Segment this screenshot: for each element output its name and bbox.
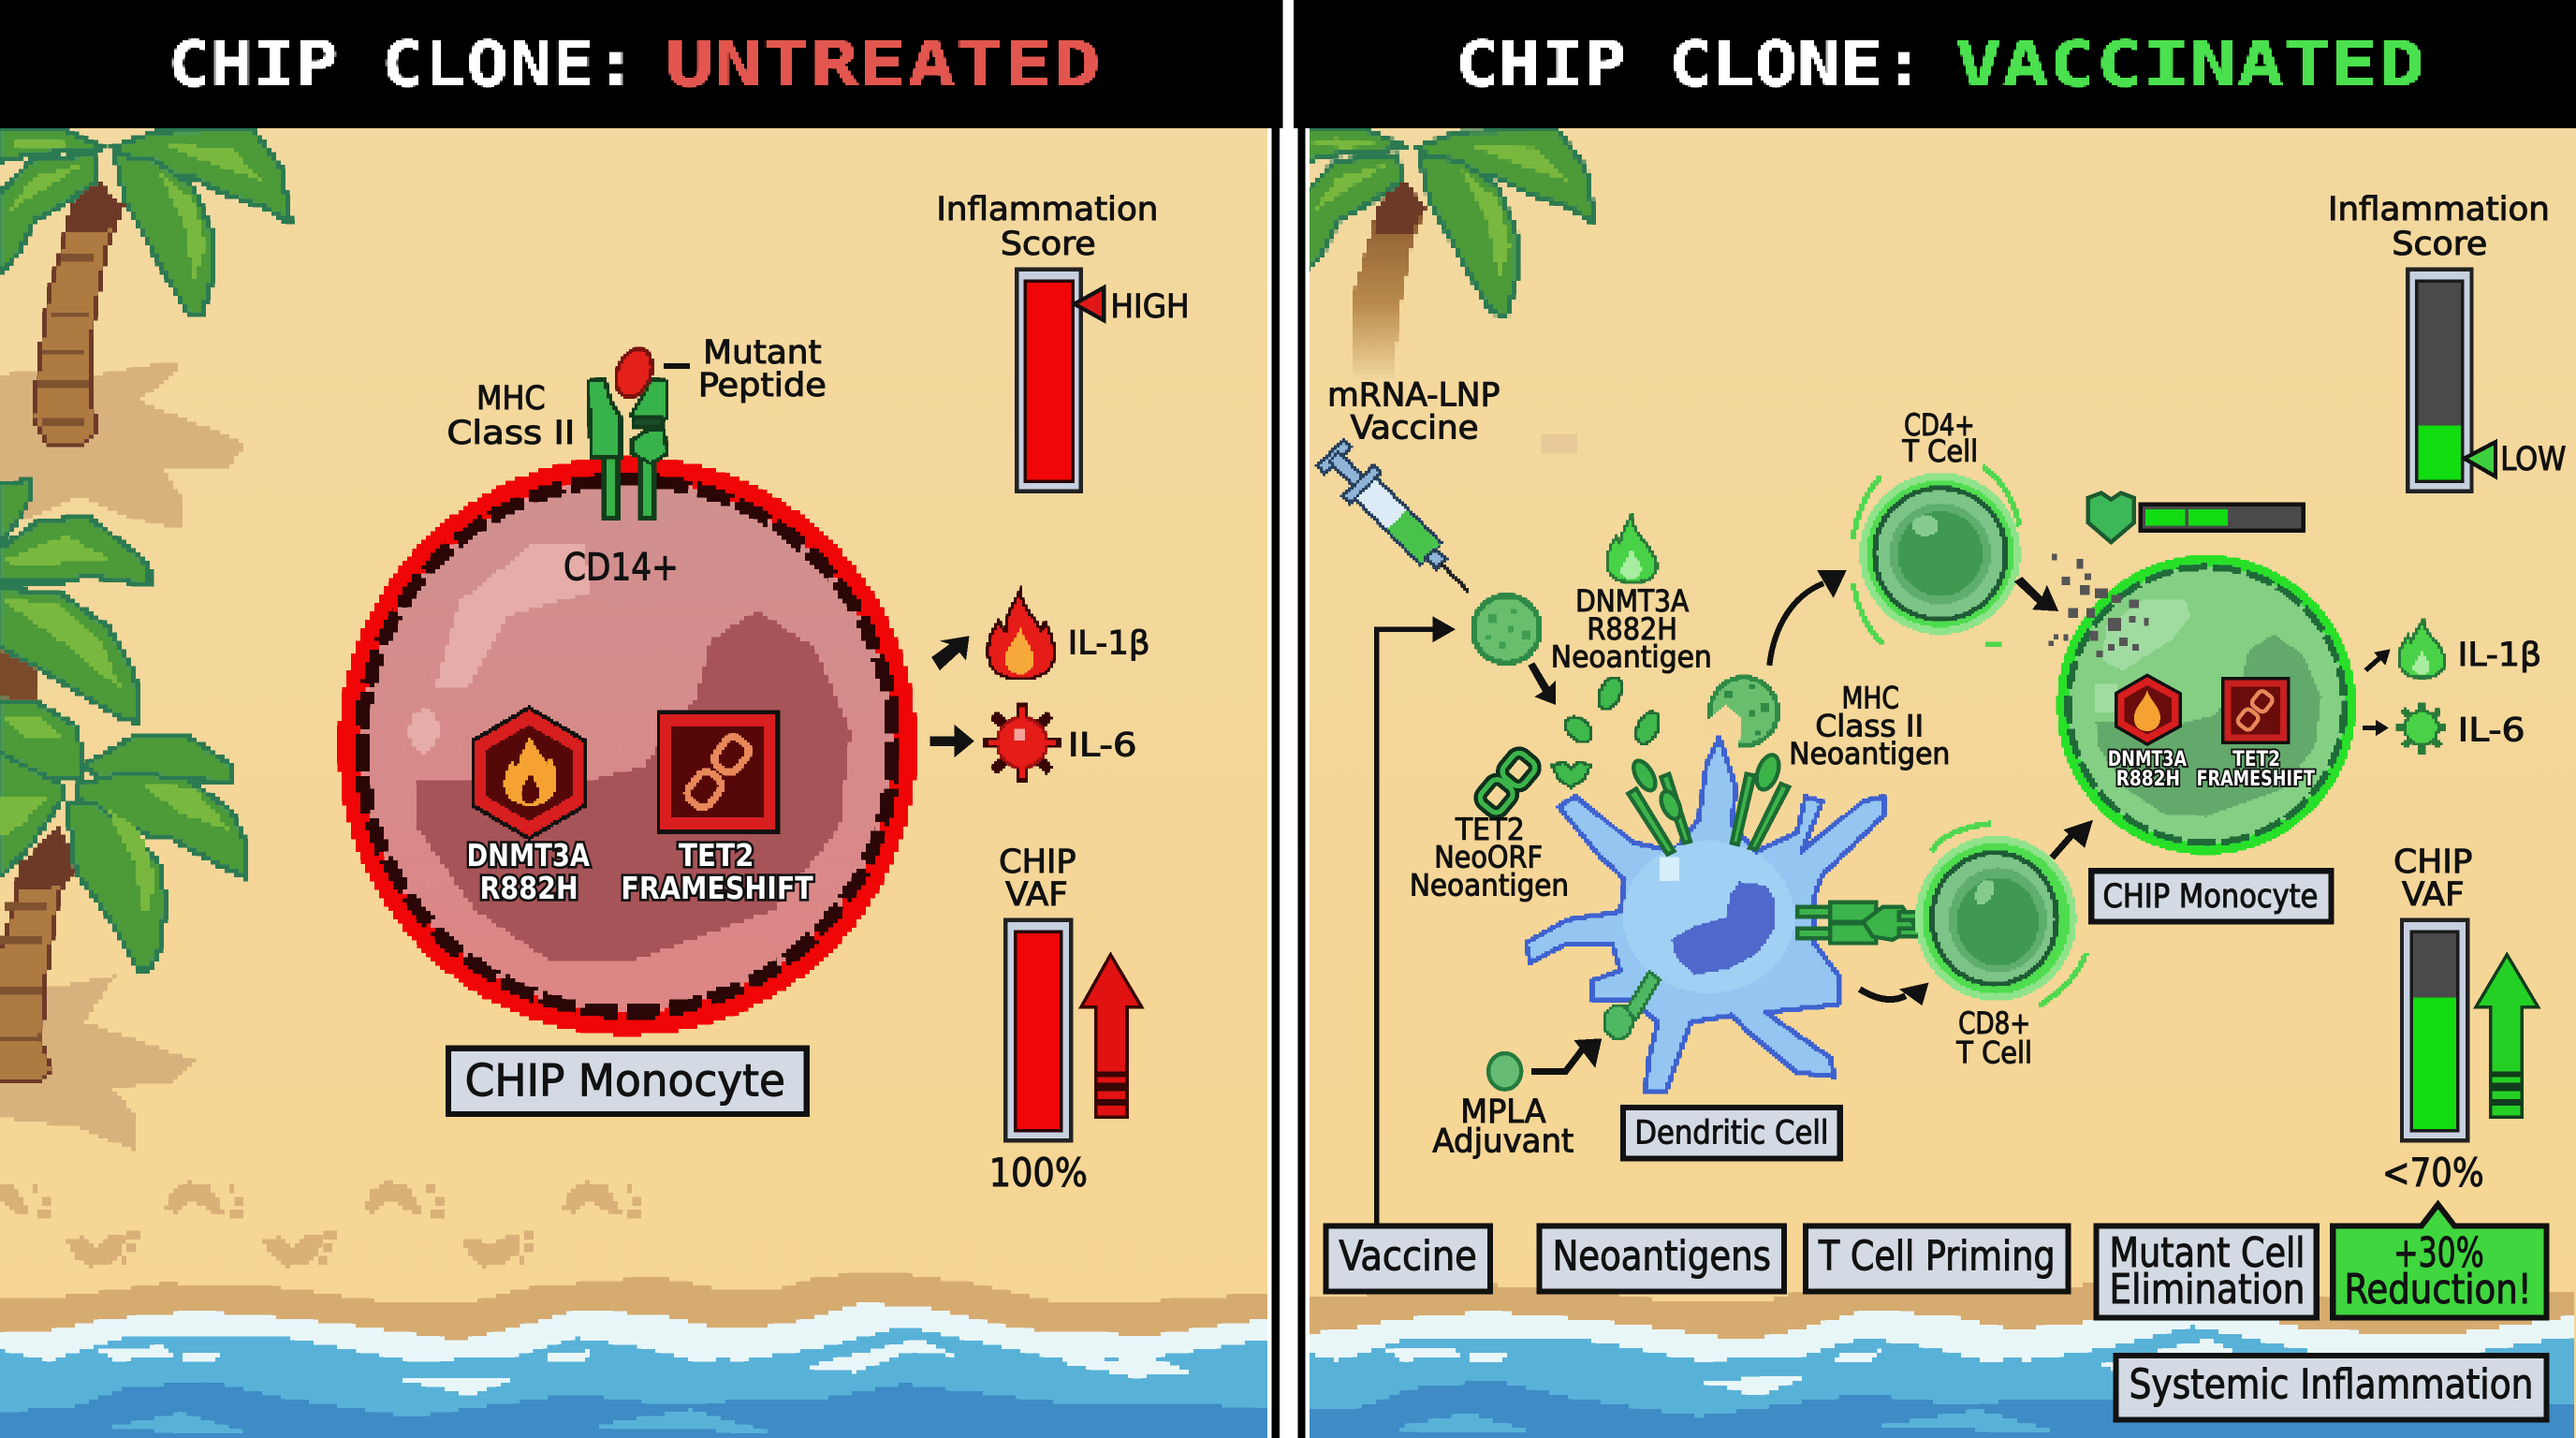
label: Mutant Peptide [664,333,827,404]
header bar [0,0,2576,128]
label: CD8+ T Cell: CD8+ [1958,1007,2030,1041]
label: DNMT3A R882H Neoantigen [1551,585,1712,675]
icon: green flame IL-1β [2399,621,2445,677]
arrow: MPLA to dendritic cell [1531,1038,1602,1071]
dendritic cell [1526,738,1883,1091]
label: TET2 FRAMESHIFT [621,837,813,906]
nucleus [414,609,851,963]
label: DNMT3A R882H: R882H [479,870,578,906]
label: MPLA Adjuvant: MPLA [1460,1093,1546,1131]
label: MPLA Adjuvant [1432,1093,1573,1160]
label: MHC Class II Neoantigen [1789,682,1950,771]
highlight [435,544,592,688]
title: vaccinated [1456,27,2425,100]
arrow: VAF green [2476,955,2539,1117]
arrow to IL-6 [929,725,974,757]
gauge: inflammation low [2408,270,2472,492]
gauge: VAF below 70 percent [2402,920,2467,1140]
beach scenery right: palm and ocean [1288,130,2576,1438]
label: TET2 NeoORF Neoantigen [1410,814,1569,903]
label: mRNA-LNP Vaccine [1327,376,1500,448]
label: TET2 NeoORF Neoantigen: NeoORF [1434,842,1543,875]
inflammation score heading right [2328,190,2550,263]
title: untreated: UNTREATED [666,27,1101,100]
label: small DNMT3A R882H: DNMT3A [2108,748,2188,771]
label: MHC Class II: MHC [476,379,546,418]
inflammation score heading right: Score [2392,225,2487,263]
center divider [1267,128,1310,1438]
nucleus [2096,634,2321,816]
step: Neoantigens: Neoantigens [1553,1233,1771,1281]
label: DNMT3A R882H Neoantigen: R882H [1587,613,1677,647]
MHC molecules on dendritic cell [1628,752,1789,855]
title: vaccinated: CHIP CLONE: [1456,27,1925,100]
icon: small TET2 badge [2223,679,2289,742]
callout: 30 percent reduction: Reduction! [2345,1266,2532,1313]
step: T Cell Priming: T Cell Priming [1818,1233,2056,1281]
inflammation score heading [936,190,1158,263]
step: Mutant Cell Elimination [2097,1225,2317,1318]
label: CD4+ T Cell: T Cell [1901,435,1978,469]
icon: LNP particle [1471,594,1543,666]
icon: syringe [1315,438,1484,607]
gauge: inflammation high [1017,270,1081,492]
label: CD14+: CD14+ [564,546,679,590]
heading: CHIP VAF right [2393,843,2472,914]
label: Dendritic Cell [1623,1108,1840,1158]
label: MHC Class II Neoantigen: Neoantigen [1789,738,1950,771]
icon: green broken chain [1477,750,1538,815]
green CHIP monocyte cell [2056,555,2356,855]
icon: MHC neoantigen particle [1705,675,1780,753]
label: DNMT3A R882H: DNMT3A [466,837,591,873]
icon: green spiked IL-6 [2397,703,2446,755]
icon: flame IL-1β [988,592,1054,679]
label: small DNMT3A R882H [2108,748,2188,791]
inflammation score heading: Score [1001,225,1096,263]
label: CHIP Monocyte small [2091,871,2331,922]
label: Mutant Peptide: Peptide [698,366,827,404]
heading: CHIP VAF right: CHIP [2393,843,2472,881]
label: green IL-1β: IL-1β [2458,636,2541,674]
label: mRNA-LNP Vaccine: mRNA-LNP [1327,376,1500,415]
label: small TET2 FRAMESHIFT: TET2 [2232,748,2280,771]
label: small TET2 FRAMESHIFT [2197,748,2315,791]
icon: green neoantigen flame [1607,516,1657,581]
icon: shield health [2088,493,2134,542]
MPLA bound to dendritic cell [1604,973,1660,1038]
arrow: VAF rising [1081,955,1142,1117]
title: untreated: CHIP CLONE: [168,27,637,100]
step: Vaccine [1325,1225,1490,1292]
label: TET2 FRAMESHIFT: FRAMESHIFT [621,870,813,906]
label: TET2 NeoORF Neoantigen: Neoantigen [1410,870,1569,903]
highlight [2103,600,2190,670]
title: vaccinated: VACCINATED [1955,27,2425,100]
label: CD8+ T Cell: T Cell [1955,1037,2032,1071]
icon: spiked IL-6 [983,703,1061,782]
arrow to green IL-6 [2363,720,2389,736]
step: Mutant Cell Elimination: Mutant Cell [2110,1229,2305,1277]
label: IL-6: IL-6 [1068,726,1137,764]
heading: CHIP VAF: CHIP [999,843,1076,881]
heading: CHIP VAF right: VAF [2402,875,2465,914]
label: CHIP Monocyte [448,1049,807,1114]
icon: MPLA adjuvant [1488,1053,1521,1090]
CD4 T cell [1853,466,2021,644]
label: TET2 FRAMESHIFT: TET2 [679,837,754,873]
heading: CHIP VAF [999,843,1076,914]
CHIP monocyte cell, untreated [339,457,916,1035]
label: small TET2 FRAMESHIFT: FRAMESHIFT [2197,768,2315,791]
label: IL-1β: IL-1β [1068,624,1150,663]
gauge: VAF 100 percent [1005,920,1071,1140]
arrow: CD8 to monocyte [2052,820,2093,858]
arrow: LNP to neoantigens [1528,662,1556,705]
marker: LOW [2465,440,2566,478]
marker: HIGH: HIGH [1110,287,1190,326]
label: CHIP Monocyte small: CHIP Monocyte [2103,877,2318,916]
MHC Class II receptor with mutant peptide [588,344,667,518]
label: MHC Class II Neoantigen: Class II [1815,710,1924,743]
title: untreated [168,27,1101,100]
sand background right [1310,128,2576,1438]
label: DNMT3A R882H [466,837,591,906]
T cell receptor synapse [1797,902,1936,943]
label: DNMT3A R882H Neoantigen: DNMT3A [1575,585,1690,619]
label: MHC Class II: Class II [446,414,575,452]
CD8 T cell [1915,823,2086,1005]
callout: 30 percent reduction: +30% [2393,1229,2484,1277]
arrow: to CD4 T cell [1769,570,1847,666]
label: Dendritic Cell: Dendritic Cell [1634,1114,1828,1152]
callout: 30 percent reduction [2333,1205,2546,1318]
inflammation score heading: Inflammation [936,190,1158,228]
icon: DNMT3A flame badge [473,708,585,838]
label: mRNA-LNP Vaccine: Vaccine [1351,409,1479,448]
value: 100%: 100% [989,1150,1088,1196]
label: green IL-6: IL-6 [2458,712,2525,750]
arrow to green IL-1β [2365,649,2391,670]
icon: TET2 broken chain badge [659,713,777,831]
panel: untreated [0,128,1298,1438]
label: CD4+ T Cell [1901,409,1978,469]
arrow to IL-1β [931,636,970,670]
connector: vaccine to LNP [1377,616,1456,1225]
label: CD8+ T Cell [1955,1007,2032,1071]
step: Neoantigens [1540,1225,1784,1292]
sand background left [0,128,1267,1438]
nucleus [1671,881,1776,976]
label: MPLA Adjuvant: Adjuvant [1432,1122,1573,1160]
debris from destroyed cells [2049,553,2149,657]
label: MHC Class II Neoantigen: MHC [1841,682,1899,715]
marker: HIGH [1075,287,1190,326]
heading: CHIP VAF: VAF [1005,875,1068,914]
label: small DNMT3A R882H: R882H [2116,768,2180,791]
health bar [2141,505,2304,531]
label: Mutant Peptide: Mutant [703,333,822,372]
beach scenery left: palms, shadows, footprints and ocean [0,130,1298,1438]
arrow: CD4 to monocyte [2014,577,2058,611]
label: MHC Class II [446,379,575,452]
sand smudge [1541,433,1577,453]
arrow: dendritic to CD8 [1860,983,1928,1005]
inflammation score heading right: Inflammation [2328,190,2550,228]
step: Vaccine: Vaccine [1339,1233,1477,1281]
label: DNMT3A R882H Neoantigen: Neoantigen [1551,641,1712,675]
label: CHIP Monocyte: CHIP Monocyte [465,1056,785,1108]
neoantigen fragments [1553,674,1663,787]
label: CD4+ T Cell: CD4+ [1904,409,1975,443]
step: Mutant Cell Elimination: Elimination [2110,1266,2305,1313]
icon: small DNMT3A badge [2116,675,2180,744]
marker: LOW: LOW [2500,440,2566,478]
step: T Cell Priming [1806,1225,2069,1292]
panel: vaccinated [1288,128,2576,1438]
value: under 70%: <70% [2382,1150,2484,1196]
label: Systemic Inflammation: Systemic Inflammation [2130,1361,2533,1409]
label: TET2 NeoORF Neoantigen: TET2 [1455,814,1525,847]
